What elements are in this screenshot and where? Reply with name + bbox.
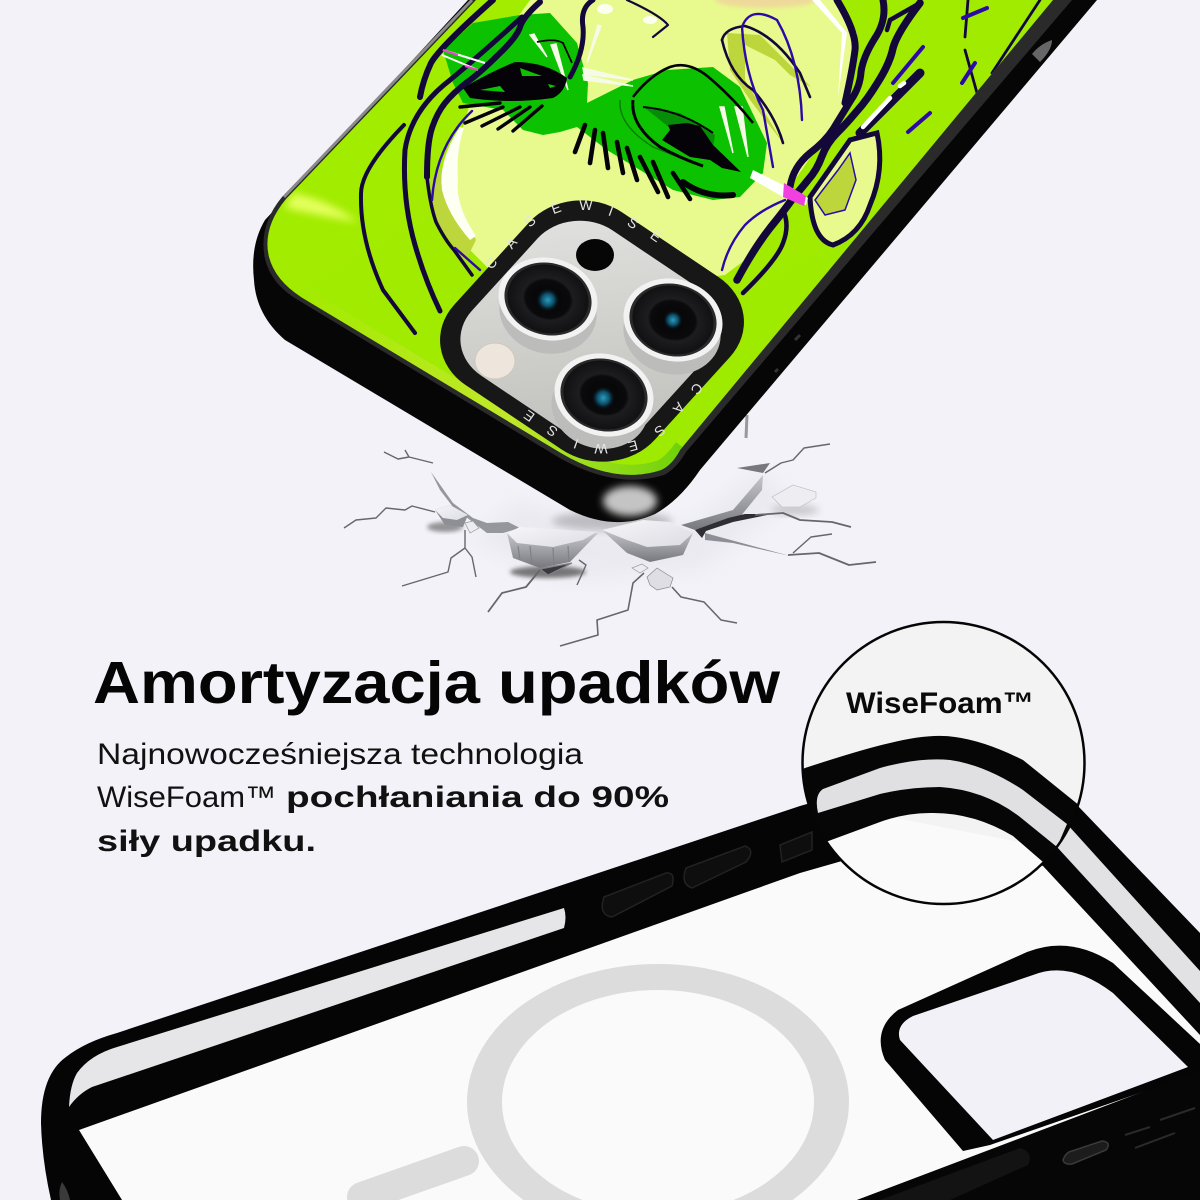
WiseFoam magnifier callout xyxy=(790,622,1085,920)
casewise ring lettering: E xyxy=(549,199,563,217)
case rim left shine xyxy=(284,0,472,197)
casewise ring lettering: W xyxy=(579,197,593,213)
casewise ring lettering: E xyxy=(521,407,537,425)
chip centre xyxy=(632,564,648,573)
bottom rail xyxy=(857,1070,1200,1200)
casewise ring lettering: A xyxy=(502,234,521,252)
casewise ring lettering: E xyxy=(648,227,664,245)
nose highlights xyxy=(597,4,657,24)
face xyxy=(458,0,857,276)
magnified clear panel xyxy=(790,815,1060,920)
island black ring xyxy=(413,177,771,485)
casewise ring lettering: S xyxy=(625,214,641,232)
earring highlights xyxy=(863,83,904,127)
right slab wedge xyxy=(705,533,790,556)
left eye lashes xyxy=(460,103,542,131)
flash xyxy=(475,343,515,379)
body text xyxy=(97,738,669,858)
case side details xyxy=(775,335,800,372)
case side button shine xyxy=(1032,40,1052,62)
magnified black rails xyxy=(790,736,1085,862)
rock top left xyxy=(507,527,597,547)
artwork shine xyxy=(285,193,358,222)
rock facets and shadow xyxy=(518,546,572,575)
ear loop olive xyxy=(727,33,811,143)
case outer body xyxy=(253,0,1097,522)
left lid xyxy=(537,40,572,63)
chip lower xyxy=(647,568,673,590)
titanium plate xyxy=(439,202,743,463)
casewise ring lettering: I xyxy=(606,203,616,219)
cracked ground illustration xyxy=(344,415,876,646)
lens two xyxy=(611,268,732,385)
body text: siły upadku. xyxy=(97,825,316,858)
lens one xyxy=(486,247,608,364)
side slot left xyxy=(69,908,566,1107)
casewise ring lettering: S xyxy=(521,212,539,230)
magenta patch xyxy=(783,183,806,206)
ear inner xyxy=(815,153,856,215)
right eye pupil xyxy=(662,123,741,172)
right eye long lash xyxy=(683,182,733,195)
right eye lashes xyxy=(575,125,690,199)
right eye lower lid xyxy=(633,100,703,166)
magsafe alignment pill xyxy=(362,1161,464,1197)
casewise ring lettering: S xyxy=(651,422,669,440)
bottom long button xyxy=(880,1148,1030,1200)
casewise ring lettering xyxy=(482,197,706,457)
lens three xyxy=(542,343,662,459)
camera island xyxy=(413,177,771,485)
rail texture xyxy=(1125,1108,1195,1148)
frame outer xyxy=(41,760,1200,1200)
right lid xyxy=(633,65,753,123)
body text: pochłaniania do 90% xyxy=(286,781,669,814)
small rock right xyxy=(772,485,816,507)
case glossy highlight xyxy=(603,486,657,516)
printed artwork xyxy=(267,0,1053,475)
left ridge xyxy=(431,472,520,533)
purple strands xyxy=(432,8,987,270)
left olive strip xyxy=(430,166,476,262)
side buttons xyxy=(602,832,812,917)
camera cutout rim xyxy=(881,946,1200,1151)
clear case, back view xyxy=(41,760,1200,1200)
small chip xyxy=(465,521,479,533)
left eye xyxy=(463,62,567,101)
casewise ring lettering: I xyxy=(571,436,581,452)
dark triangle xyxy=(737,463,770,473)
clear back panel xyxy=(79,830,1200,1200)
right ridge xyxy=(681,475,763,530)
eye shadow xyxy=(443,13,767,200)
casewise ring lettering: C xyxy=(688,380,706,398)
rock fragment centre xyxy=(602,530,693,562)
crack lines xyxy=(344,415,876,646)
magenta clip left xyxy=(442,50,485,70)
right white hair streak xyxy=(812,0,847,97)
magnified frame xyxy=(804,736,1078,862)
magsafe ring xyxy=(467,964,849,1200)
right eye upper lash line xyxy=(643,107,713,133)
magnifier lens fill xyxy=(802,622,1085,904)
body text: WiseFoam™ xyxy=(97,781,276,814)
casewise ring lettering: S xyxy=(544,422,560,440)
white cheek streak xyxy=(441,127,476,240)
magnifier label: WiseFoam™ xyxy=(846,687,1034,720)
casewise ring lettering: C xyxy=(482,254,500,272)
camera cutout xyxy=(899,970,1188,1140)
magenta clip tint xyxy=(443,50,478,70)
right eye outline xyxy=(620,100,703,167)
casewise ring lettering: A xyxy=(669,399,688,417)
face highlights xyxy=(530,25,748,157)
small rock top left xyxy=(435,505,468,520)
ear xyxy=(810,133,880,245)
small rock left xyxy=(435,505,468,527)
casewise ring lettering: E xyxy=(626,437,640,455)
magnifier outline xyxy=(802,622,1084,904)
heading: Amortyzacja upadków xyxy=(93,650,780,716)
dark cavity xyxy=(695,514,772,538)
rock top centre xyxy=(602,520,693,547)
magenta clip right xyxy=(750,170,808,205)
hair strands xyxy=(361,0,1040,333)
left corner port xyxy=(59,1182,70,1200)
bottom port xyxy=(1063,1141,1108,1164)
microphone hole xyxy=(576,239,614,271)
right eye iris xyxy=(645,108,715,148)
rock fragment left xyxy=(507,533,598,568)
face peach tint xyxy=(715,0,815,8)
phone case: green back, tilted xyxy=(250,0,1100,522)
side slot right xyxy=(1057,824,1200,1003)
casewise ring lettering: W xyxy=(594,441,608,457)
body text: Najnowocześniejsza technologia xyxy=(97,738,583,771)
artwork lit edge xyxy=(301,297,684,475)
case inner rim xyxy=(263,0,1072,480)
magnified foam slot xyxy=(817,759,1067,847)
left eye iris glints xyxy=(480,68,556,92)
